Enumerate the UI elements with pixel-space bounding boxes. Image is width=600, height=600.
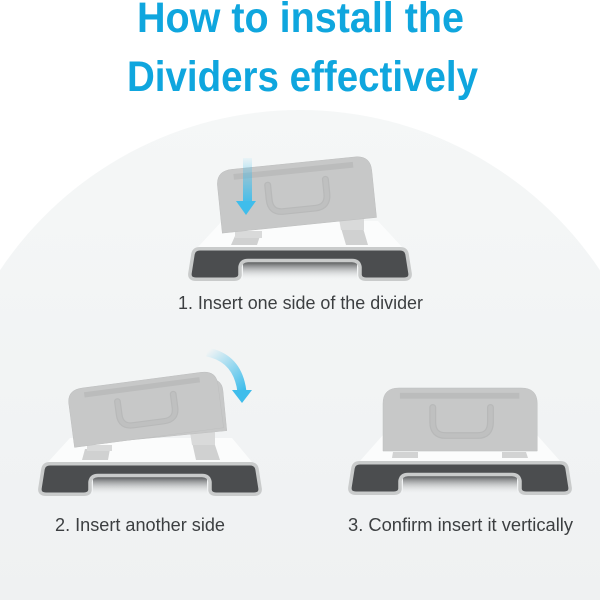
base plate top xyxy=(48,438,252,462)
base front xyxy=(350,463,570,494)
slot tracks xyxy=(231,228,368,245)
curved arrow xyxy=(207,352,252,403)
divider xyxy=(383,388,537,451)
step 3 caption: 3. Confirm insert it vertically xyxy=(348,515,573,535)
base plate top xyxy=(359,435,561,462)
title xyxy=(127,0,478,101)
step 1 illustration xyxy=(190,155,410,280)
front divider behind xyxy=(72,378,227,445)
step 2 illustration xyxy=(40,352,260,495)
tilted divider on top xyxy=(67,370,224,447)
step 2 caption: 2. Insert another side xyxy=(55,515,225,535)
divider xyxy=(216,155,377,233)
feet xyxy=(87,432,215,451)
base front xyxy=(190,249,410,280)
feet xyxy=(235,219,364,238)
slot tracks xyxy=(392,452,528,458)
step 3 illustration xyxy=(350,388,570,494)
slot tracks xyxy=(82,442,220,460)
step 1 caption: 1. Insert one side of the divider xyxy=(178,293,423,313)
title: Dividers effectively xyxy=(127,54,478,101)
arrow down xyxy=(236,158,256,215)
base front xyxy=(40,464,260,495)
base plate top xyxy=(198,221,402,247)
